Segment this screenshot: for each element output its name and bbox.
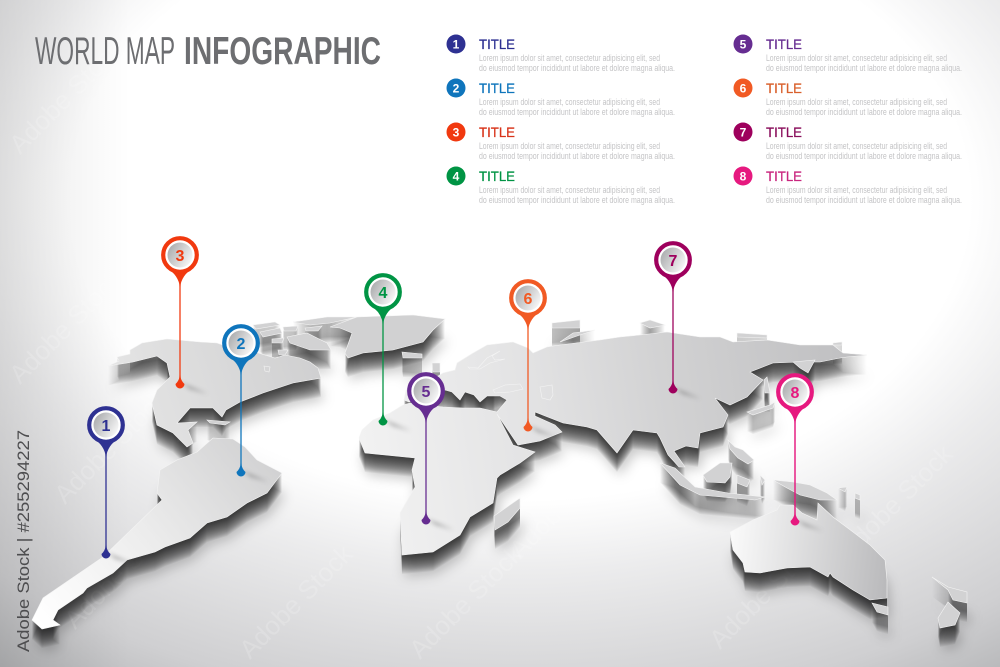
title: INFOGRAPHIC	[184, 30, 381, 73]
legend item 5: 5	[740, 38, 747, 52]
legend item 1: 1	[453, 38, 460, 52]
pin 8: 8	[791, 385, 800, 402]
pin 3	[163, 238, 208, 394]
legend item 6: 6	[740, 82, 747, 96]
pin 1: 1	[102, 418, 111, 435]
pin 2	[224, 326, 269, 482]
map drop shadow	[35, 337, 970, 651]
legend item 1	[446, 34, 675, 74]
watermark: Adobe Stock	[48, 383, 174, 509]
legend item 2: do eiusmod tempor incididunt ut labore et dolore magna aliqua.	[479, 107, 675, 118]
legend item 4: 4	[453, 170, 460, 184]
pin 2: 2	[237, 336, 246, 353]
watermark: Adobe Stock	[233, 248, 359, 374]
pin 6: 6	[524, 291, 533, 308]
title: WORLD MAP	[35, 30, 175, 73]
stock id vertical text: Adobe Stock | #255294227	[14, 430, 33, 652]
legend item 3: TITLE	[479, 124, 515, 140]
legend item 1: Lorem ipsum dolor sit amet, consectetur adipisicing elit, sed	[479, 53, 660, 64]
watermark: Adobe Stock	[703, 528, 829, 654]
legend item 5: TITLE	[766, 36, 802, 52]
legend item 7: TITLE	[766, 124, 802, 140]
watermark: Adobe Stock	[833, 438, 959, 564]
Greenland	[330, 315, 445, 358]
legend item 8: TITLE	[766, 168, 802, 184]
legend item 3: 3	[453, 126, 460, 140]
legend item 3: do eiusmod tempor incididunt ut labore et dolore magna aliqua.	[479, 151, 675, 162]
legend item 2	[446, 78, 675, 118]
legend	[446, 34, 962, 206]
South America	[32, 438, 282, 629]
legend item 2: Lorem ipsum dolor sit amet, consectetur adipisicing elit, sed	[479, 97, 660, 108]
pin 6	[511, 281, 556, 437]
North America	[108, 339, 321, 447]
pin 4	[366, 275, 411, 431]
watermark: Adobe Stock	[503, 438, 629, 564]
legend item 6	[734, 78, 962, 118]
watermark: Adobe Stock	[3, 33, 129, 159]
legend item 4: do eiusmod tempor incididunt ut labore et dolore magna aliqua.	[479, 195, 675, 206]
legend item 7	[734, 122, 962, 162]
legend item 4: Lorem ipsum dolor sit amet, consectetur adipisicing elit, sed	[479, 185, 660, 196]
map extrusion	[32, 316, 967, 648]
pin 5: 5	[422, 384, 431, 401]
watermark: Adobe Stock	[58, 508, 184, 634]
legend item 2: 2	[453, 82, 460, 96]
legend item 1: TITLE	[479, 36, 515, 52]
legend item 4	[446, 166, 675, 206]
watermark: Adobe Stock	[3, 263, 129, 389]
legend item 2: TITLE	[479, 80, 515, 96]
legend item 6: TITLE	[766, 80, 802, 96]
title	[35, 30, 381, 73]
map top surface	[32, 315, 967, 629]
Australia	[730, 503, 887, 600]
islands	[207, 317, 967, 628]
watermark: Adobe Stock	[158, 93, 284, 219]
pin 1	[89, 408, 134, 564]
watermark: Adobe Stock	[863, 238, 989, 364]
pin 3: 3	[176, 248, 185, 265]
legend item 8	[734, 166, 962, 206]
legend item 3	[446, 122, 675, 162]
pin 5	[409, 374, 454, 530]
pin 7	[656, 243, 701, 399]
legend item 1: do eiusmod tempor incididunt ut labore et dolore magna aliqua.	[479, 63, 675, 74]
world map	[32, 315, 970, 651]
legend item 4: TITLE	[479, 168, 515, 184]
watermark: Adobe Stock	[233, 538, 359, 664]
legend item 3: Lorem ipsum dolor sit amet, consectetur adipisicing elit, sed	[479, 141, 660, 152]
pin 8	[778, 375, 823, 531]
legend item 5	[734, 34, 962, 74]
watermark: Adobe Stock	[673, 258, 799, 384]
Eurasia and Africa	[359, 332, 867, 555]
watermark: Adobe Stock	[403, 538, 529, 664]
pin 7: 7	[669, 253, 678, 270]
legend item 7: 7	[740, 126, 747, 140]
legend item 8: 8	[740, 170, 747, 184]
pin 4: 4	[379, 285, 388, 302]
